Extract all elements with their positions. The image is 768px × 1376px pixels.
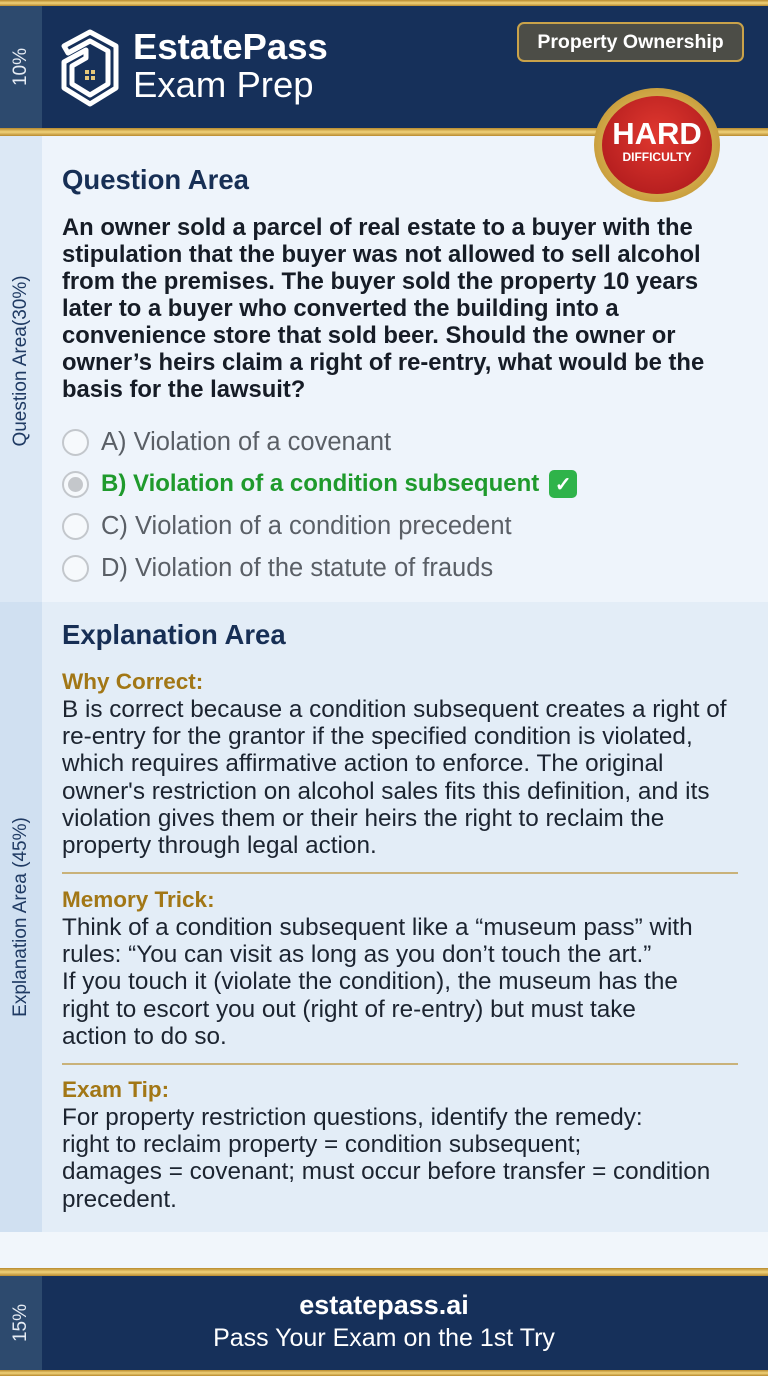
label: explanation area 45%: Explanation Area (45%) bbox=[10, 817, 31, 1017]
memory trick: If you touch it (violate the condition), the museum has the bbox=[62, 968, 678, 995]
memory trick: rules: “You can visit as long as you don’t touch the art.” bbox=[62, 941, 651, 968]
category tag bbox=[517, 22, 744, 62]
exam tip: damages = covenant; must occur before transfer = condition bbox=[62, 1158, 710, 1185]
option D: D) Violation of the statute of frauds bbox=[101, 554, 493, 582]
question text: basis for the lawsuit? bbox=[62, 376, 305, 403]
heading: question area: Question Area bbox=[62, 164, 249, 195]
memory trick: action to do so. bbox=[62, 1023, 227, 1050]
question text: owner’s heirs claim a right of re-entry, what would be the bbox=[62, 349, 704, 376]
why correct: owner's restriction on alcohol sales fits this definition, and its bbox=[62, 778, 709, 805]
badge: hard difficulty: DIFFICULTY bbox=[622, 150, 692, 164]
why correct: violation gives them or their heirs the right to reclaim the bbox=[62, 805, 664, 832]
question text: later to a buyer who converted the building into a bbox=[62, 295, 619, 322]
logo text: Exam Prep bbox=[133, 64, 314, 105]
explanation area panel bbox=[0, 602, 768, 1232]
footer text bbox=[213, 1290, 555, 1352]
category tag: Property Ownership bbox=[537, 30, 724, 52]
why correct bbox=[62, 669, 727, 859]
why correct: re-entry for the grantor if the specified condition is violated, bbox=[62, 723, 693, 750]
why correct: Why Correct: bbox=[62, 669, 203, 694]
footer text: estatepass.ai bbox=[299, 1290, 469, 1320]
footer bbox=[0, 1268, 768, 1376]
question text: stipulation that the buyer was not allowed to sell alcohol bbox=[62, 241, 701, 268]
logo text bbox=[133, 26, 328, 105]
header bbox=[0, 0, 768, 136]
why correct: which requires affirmative action to enforce. The original bbox=[62, 750, 663, 777]
icon: logo house bbox=[62, 30, 118, 106]
memory trick: Think of a condition subsequent like a “museum pass” with bbox=[62, 914, 693, 941]
exam tip: For property restriction questions, identify the remedy: bbox=[62, 1104, 643, 1131]
exam tip bbox=[62, 1077, 710, 1213]
why correct: B is correct because a condition subsequent creates a right of bbox=[62, 696, 726, 723]
option B correct: B) Violation of a condition subsequent bbox=[101, 470, 539, 497]
memory trick: right to escort you out (right of re-entry) but must take bbox=[62, 996, 636, 1023]
why correct: property through legal action. bbox=[62, 832, 377, 859]
question text: convenience store that sold beer. Should the owner or bbox=[62, 322, 676, 349]
label: 15%: 15% bbox=[10, 1304, 31, 1342]
badge: hard difficulty: HARD bbox=[612, 116, 702, 151]
option B correct: ✓ bbox=[555, 474, 572, 496]
question text: An owner sold a parcel of real estate to a buyer with the bbox=[62, 214, 693, 241]
label: 10%: 10% bbox=[10, 48, 31, 86]
exam tip: right to reclaim property = condition subsequent; bbox=[62, 1131, 581, 1158]
memory trick bbox=[62, 887, 693, 1050]
exam tip: Exam Tip: bbox=[62, 1077, 169, 1102]
option A: A) Violation of a covenant bbox=[101, 428, 391, 456]
question area panel bbox=[0, 136, 768, 602]
badge: hard difficulty bbox=[594, 88, 720, 202]
question text bbox=[62, 214, 704, 403]
option C: C) Violation of a condition precedent bbox=[101, 512, 512, 540]
exam tip: precedent. bbox=[62, 1186, 177, 1213]
logo text: EstatePass bbox=[133, 26, 328, 67]
question text: from the premises. The buyer sold the property 10 years bbox=[62, 268, 698, 295]
heading: explanation area: Explanation Area bbox=[62, 619, 286, 650]
label: question area 30%: Question Area(30%) bbox=[10, 275, 31, 447]
memory trick: Memory Trick: bbox=[62, 887, 215, 912]
footer text: Pass Your Exam on the 1st Try bbox=[213, 1324, 555, 1352]
